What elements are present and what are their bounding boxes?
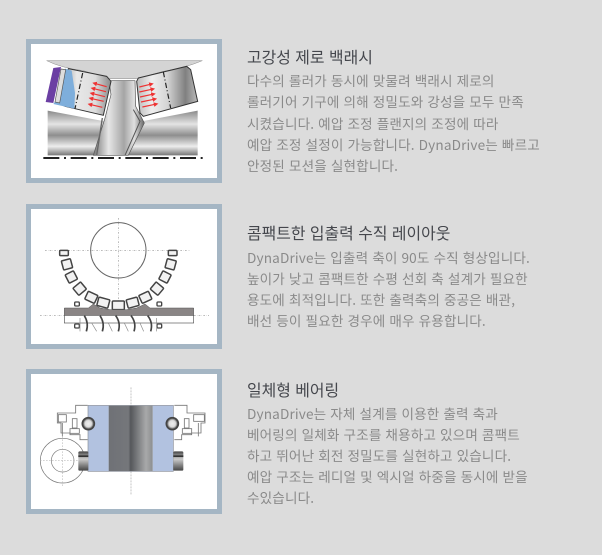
text block: section 2 description: 높이가 낮고 콤팩트한 수평 선회 축 설계가 필요한	[247, 268, 528, 288]
text block: section 3 description	[247, 403, 528, 507]
illustration: roller gear and cam	[40, 218, 209, 332]
text block: section 1 description: 시켰습니다. 예압 조정 플랜지의 조정에 따라	[247, 113, 499, 133]
text block: section 1 description: 다수의 롤러가 동시에 맞물려 백래시 제로의	[247, 70, 495, 90]
text block: section 1 description	[247, 70, 540, 175]
illustration: bearing cross section	[40, 387, 206, 494]
text block: section 3 description: 하고 뛰어난 회전 정밀도를 실현하고 있습니다.	[247, 445, 511, 465]
text block: section 3 description: 베어링의 일체화 구조를 채용하고 있으며 콤팩트	[247, 424, 520, 444]
heading: compact vertical layout: 콤팩트한 입출력 수직 레이아웃	[247, 221, 450, 244]
panel: compact layout figure	[26, 204, 222, 349]
heading: high rigidity zero backlash	[247, 45, 540, 175]
text block: section 2 description: DynaDrive는 입출력 축이 90도 수직 형상입니다.	[247, 247, 530, 267]
text block: section 2 description	[247, 247, 530, 330]
text block: section 1 description: 롤러기어 기구에 의해 정밀도와 강성을 모두 만족	[247, 91, 524, 111]
text block: section 3 description: 수있습니다.	[247, 487, 314, 507]
heading: compact vertical layout	[247, 221, 530, 330]
text block: section 2 description: 용도에 최적입니다. 또한 출력축의 중공은 배관,	[247, 289, 515, 309]
heading: integrated bearing	[247, 378, 528, 507]
text block: section 3 description: DynaDrive는 자체 설계를 이용한 출력 축과	[247, 403, 498, 423]
illustration: tapered roller engagement	[43, 60, 203, 159]
text block: section 2 description: 배선 등이 필요한 경우에 매우 유용합니다.	[247, 310, 486, 330]
text block: section 3 description: 예압 구조는 레디얼 및 엑시얼 하중을 동시에 받을	[247, 466, 528, 486]
panel: integrated bearing figure	[26, 369, 222, 514]
heading: high rigidity zero backlash: 고강성 제로 백래시	[247, 45, 373, 68]
heading: integrated bearing: 일체형 베어링	[247, 378, 339, 401]
panel: high rigidity backlash figure	[26, 39, 222, 183]
text block: section 1 description: 안정된 모션을 실현합니다.	[247, 155, 398, 175]
text block: section 1 description: 예압 조정 설정이 가능합니다. DynaDrive는 빠르고	[247, 134, 540, 154]
